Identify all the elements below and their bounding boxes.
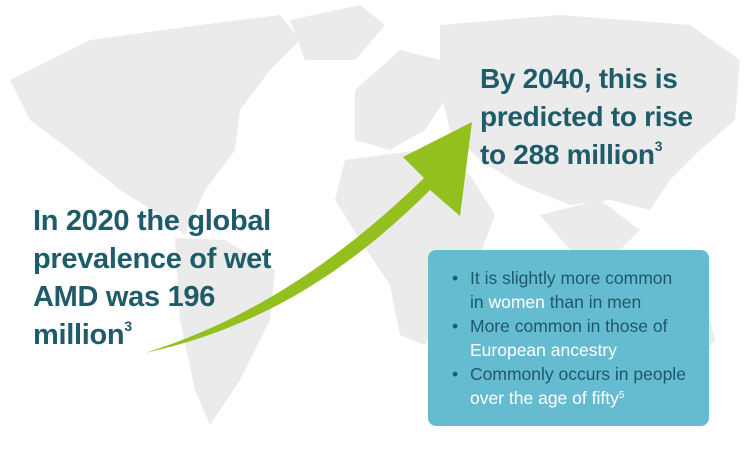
heading: 2020: AMD was 196: [33, 281, 215, 313]
heading: 2020: million3: [33, 318, 132, 351]
info box: European ancestry: [470, 340, 617, 360]
info box: More common in those of: [470, 316, 667, 336]
heading: 2040: to 288 million3: [480, 138, 662, 170]
info box: [428, 250, 709, 426]
info box: It is slightly more common: [470, 268, 672, 288]
heading: 2040: predicted to rise: [480, 101, 693, 132]
info box: Commonly occurs in people: [470, 364, 686, 384]
heading: 2020: In 2020 the global: [33, 205, 271, 237]
info box: over the age of fifty5: [470, 388, 624, 408]
heading: 2040: [480, 63, 693, 170]
heading: 2020: prevalence of wet: [33, 243, 271, 275]
info box: in women than in men: [470, 292, 641, 312]
heading: 2040: By 2040, this is: [480, 63, 678, 94]
heading: 2020: [33, 205, 272, 351]
